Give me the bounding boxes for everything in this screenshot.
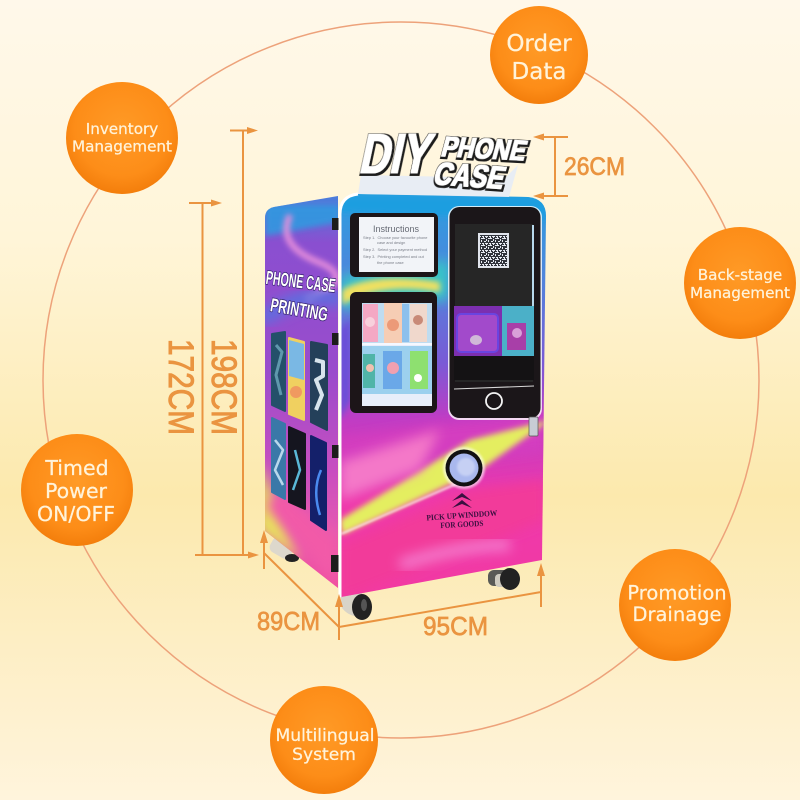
badge: Timed Power ON/OFF: ON/OFF [37,502,115,526]
badge: Back-stage Management: Back-stage [698,266,782,284]
wheel: front left [340,590,372,620]
side panel [265,196,338,588]
wheel: rear left [267,535,299,562]
badge: Inventory Management [66,82,178,194]
top sign: DIY PHONE CASE: CASE [430,156,510,196]
dimension: 198CM height: 198CM [204,339,243,435]
badge: Inventory Management: Management [72,138,172,156]
front panel [340,194,550,600]
dimension: 26CM height [533,134,625,200]
dimension: 172CM height [161,200,259,558]
phone case artwork [272,332,327,530]
badge: Promotion Drainage: Drainage [632,603,722,626]
top sign: DIY PHONE CASE [355,123,531,197]
instruction screen: case and design [377,240,405,245]
vending machine [258,123,550,600]
pick up window [443,447,485,489]
instruction screen: Step 2. Select your payment method [363,247,427,252]
dimension: 95CM width [335,563,545,641]
badge: Back-stage Management: Management [690,284,790,302]
dimension: 89CM depth: 89CM [257,606,320,636]
wheel: front right [488,568,520,590]
badge: Timed Power ON/OFF [21,434,133,546]
dimension: 95CM width: 95CM [423,611,488,641]
top sign: DIY PHONE CASE: DIY [355,123,439,185]
side heading: PHONE CASE PRINTING: PRINTING [269,295,329,326]
badge: Multilingual System [270,686,378,794]
badge: Multilingual System: System [292,745,356,765]
QR code [478,233,509,268]
badge: Timed Power ON/OFF: Power [45,479,108,503]
pick up label: FOR GOODS [440,519,484,530]
badge: Timed Power ON/OFF: Timed [44,456,109,480]
side heading: PHONE CASE PRINTING [265,268,337,326]
top sign: DIY PHONE CASE: PHONE [438,131,531,166]
instruction screen: Instructions [373,224,420,234]
product display window [350,292,437,413]
pick up label [426,508,498,530]
touch screen phone [448,206,542,420]
instruction screen: the phone case [377,260,404,265]
instruction screen [350,213,438,277]
instruction screen: Step 3. Printing completed and out [363,254,425,259]
badge: Promotion Drainage: Promotion [627,582,727,604]
badge: Order Data: Data [512,59,566,85]
side hinges [331,218,339,572]
dimension: 198CM height [204,127,258,555]
badge: Order Data: Order [506,31,572,57]
pick up arrows [452,493,472,508]
dimension: 172CM height: 172CM [161,339,200,435]
pick up label: PICK UP WINDDOW [426,508,498,522]
door lock [529,417,538,436]
badge: Inventory Management: Inventory [86,120,158,138]
badge: Multilingual System: Multilingual [275,726,375,746]
instruction screen: Step 1. Choose your favourite phone [363,235,427,240]
dimension: 26CM height: 26CM [564,153,625,181]
badge: Order Data [490,6,588,104]
side heading: PHONE CASE PRINTING: PHONE CASE [265,268,337,297]
badge: Promotion Drainage [619,549,731,661]
dimension: 89CM depth [257,530,339,636]
badge: Back-stage Management [684,227,796,339]
